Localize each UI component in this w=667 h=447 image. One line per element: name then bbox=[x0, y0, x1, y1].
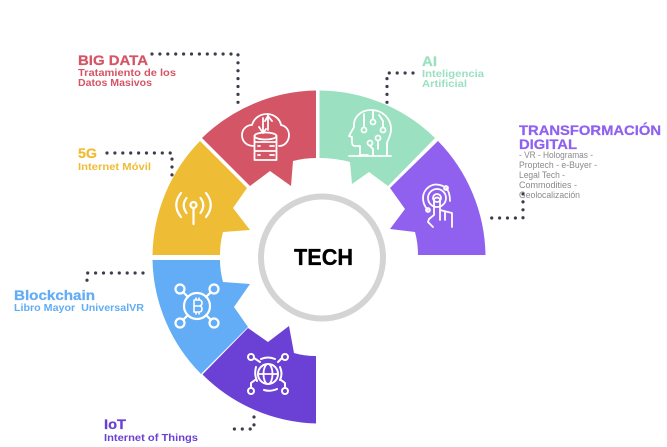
label: IoT: Internet of Things bbox=[104, 433, 198, 444]
icon: IoT globe bbox=[248, 354, 288, 394]
label: Big Data: Datos Masivos bbox=[78, 78, 152, 89]
label: AI bbox=[422, 53, 484, 90]
label: AI: Artificial bbox=[422, 79, 467, 90]
label: Big Data: BIG DATA bbox=[78, 52, 148, 68]
icon: AI head with circuits bbox=[349, 110, 391, 156]
label: Transformación Digital: TRANSFORMACIÓN bbox=[519, 121, 661, 138]
icon: bitcoin network bbox=[176, 284, 218, 328]
list: Transformación Digital topics: Legal Tech - bbox=[519, 170, 565, 180]
list: Transformación Digital topics: Geolocalización bbox=[519, 190, 580, 200]
connector: IoT bbox=[229, 417, 254, 429]
list: Transformación Digital topics bbox=[519, 150, 597, 200]
label: 5G bbox=[78, 145, 151, 173]
segment: AI bbox=[320, 90, 435, 186]
icon: touch finger with target bbox=[423, 185, 452, 227]
label: Blockchain bbox=[14, 287, 145, 314]
icon: cloud and database bbox=[242, 114, 289, 160]
list: Transformación Digital topics: Proptech - e-Buyer - bbox=[519, 160, 597, 170]
connector: Big Data bbox=[152, 54, 238, 110]
label: IoT: IoT bbox=[104, 416, 126, 432]
label: Blockchain: Libro Mayor UniversalVR bbox=[14, 303, 145, 314]
label: Big Data: Tratamiento de los bbox=[78, 68, 176, 79]
segment: IoT bbox=[202, 326, 316, 424]
segment: Blockchain bbox=[152, 260, 250, 374]
segment: Big Data bbox=[202, 90, 316, 186]
label: AI: AI bbox=[422, 53, 437, 69]
label: 5G: Internet Móvil bbox=[78, 162, 151, 173]
icon: antenna signal bbox=[176, 193, 211, 224]
label: IoT bbox=[104, 416, 198, 444]
list: Transformación Digital topics: Commodities - bbox=[519, 180, 577, 190]
segment: Transformación Digital bbox=[390, 141, 486, 255]
connector: Blockchain bbox=[87, 273, 143, 282]
list: Transformación Digital topics: - VR - Hologramas - bbox=[519, 150, 593, 160]
label: Transformación Digital: DIGITAL bbox=[519, 136, 577, 152]
connector: 5G bbox=[107, 153, 172, 178]
connector: Transformación Digital bbox=[485, 194, 523, 218]
center title: TECH bbox=[294, 244, 353, 270]
central ring bbox=[261, 196, 383, 318]
segment: 5G bbox=[152, 141, 250, 255]
connector: AI bbox=[387, 73, 413, 104]
label: 5G: 5G bbox=[78, 145, 97, 161]
label: Transformación Digital bbox=[519, 121, 661, 152]
label: Big Data bbox=[78, 52, 176, 89]
label: AI: Inteligencia bbox=[422, 69, 484, 80]
label: Blockchain: Blockchain bbox=[14, 287, 95, 303]
